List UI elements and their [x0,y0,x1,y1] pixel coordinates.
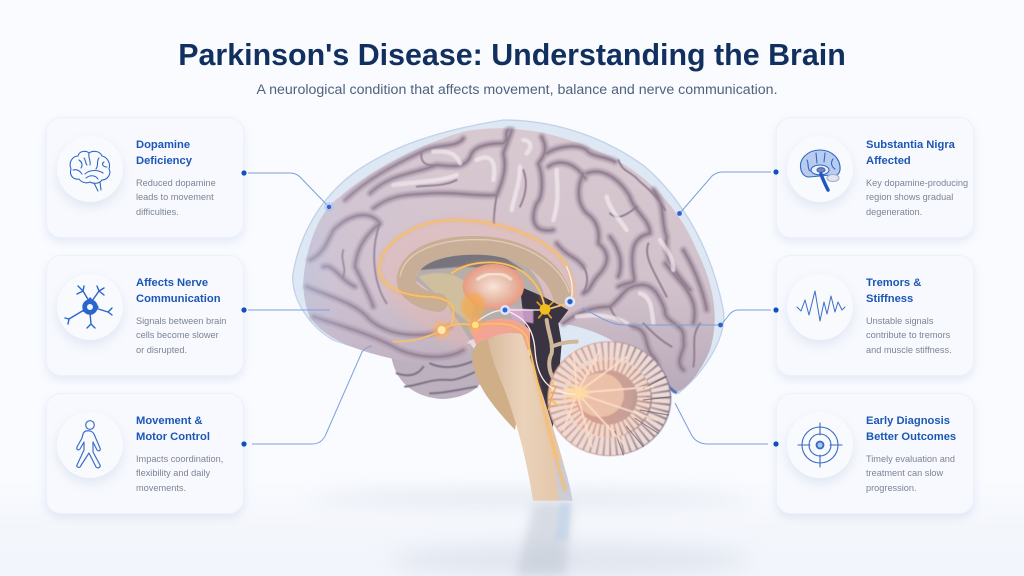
icon: brain cross-section [787,136,853,202]
heading: Better Outcomes [866,431,956,443]
description: Timely evaluation and [866,454,955,464]
floor shadow and reflection [0,480,1024,576]
subtitle: A neurological condition that affects movement, balance and nerve communication. [256,82,778,98]
description: progression. [866,483,917,493]
description: Reduced dopamine [136,178,216,188]
nerve pathways [379,220,575,490]
connector: nerve communication [241,307,330,313]
panel: tremors and stiffness [776,255,974,376]
connector: movement [241,346,372,447]
icon: neuron [57,274,123,340]
description [136,178,216,217]
cortical sulci [307,130,707,393]
heading: Substantia Nigra [866,139,955,151]
heading: Communication [136,293,221,305]
front membrane tint [303,132,463,367]
connector: tremors [582,307,779,327]
description [136,316,226,355]
corpus callosum arc [406,245,562,303]
connector: dopamine deficiency [241,170,334,212]
description: Key dopamine-producing [866,178,968,188]
connector: substantia nigra [677,169,779,216]
heading [136,139,192,167]
cerebellar peduncle [547,320,577,382]
description: Unstable signals [866,316,933,326]
icon: brain [57,136,123,202]
heading [866,139,955,167]
dark recess [520,287,568,443]
pink glow around limbic system [380,218,577,350]
description: contribute to tremors [866,330,950,340]
neural nodes [433,296,575,339]
panel: substantia nigra affected [776,117,974,238]
lower frontal lobe [392,343,487,399]
thalamus [463,264,524,309]
description: movements. [136,483,186,493]
cerebrum mass [303,128,715,393]
description: cells become slower [136,330,219,340]
brainstem [472,333,573,501]
description [136,454,223,493]
title: Parkinson's Disease: Understanding the Brain [178,38,846,72]
heading: Early Diagnosis [866,415,950,427]
icon: walking person [57,412,123,478]
description: Impacts coordination, [136,454,223,464]
heading: Movement & [136,415,203,427]
heading: Motor Control [136,431,210,443]
fold highlights [393,140,673,323]
heading: Deficiency [136,155,192,167]
description: treatment can slow [866,468,943,478]
panel: movement and motor control [46,393,244,514]
description [866,316,952,355]
brain [293,120,724,501]
panel: dopamine deficiency [46,117,244,238]
panel: early diagnosis better outcomes [776,393,974,514]
heading [866,415,956,443]
heading: Affected [866,155,911,167]
inner cavity [415,252,547,340]
icon: target [787,412,853,478]
description: region shows gradual [866,192,953,202]
description: leads to movement [136,192,214,202]
description [866,454,955,493]
description: flexibility and daily [136,468,210,478]
description: Signals between brain [136,316,226,326]
heading: Affects Nerve [136,277,208,289]
midbrain glow [461,293,485,321]
description: and muscle stiffness. [866,345,952,355]
heading: Dopamine [136,139,190,151]
heading [136,277,221,305]
heading [136,415,210,443]
cerebellum [547,341,671,456]
heading [866,277,921,305]
heading: Tremors & [866,277,921,289]
description [866,178,968,217]
icon: tremor waveform [787,274,853,340]
description: degeneration. [866,207,922,217]
description: difficulties. [136,207,179,217]
panel: affects nerve communication [46,255,244,376]
description: or disrupted. [136,345,187,355]
heading: Stiffness [866,293,913,305]
translucent outer membrane [293,120,724,393]
connector: early diagnosis [675,403,779,447]
